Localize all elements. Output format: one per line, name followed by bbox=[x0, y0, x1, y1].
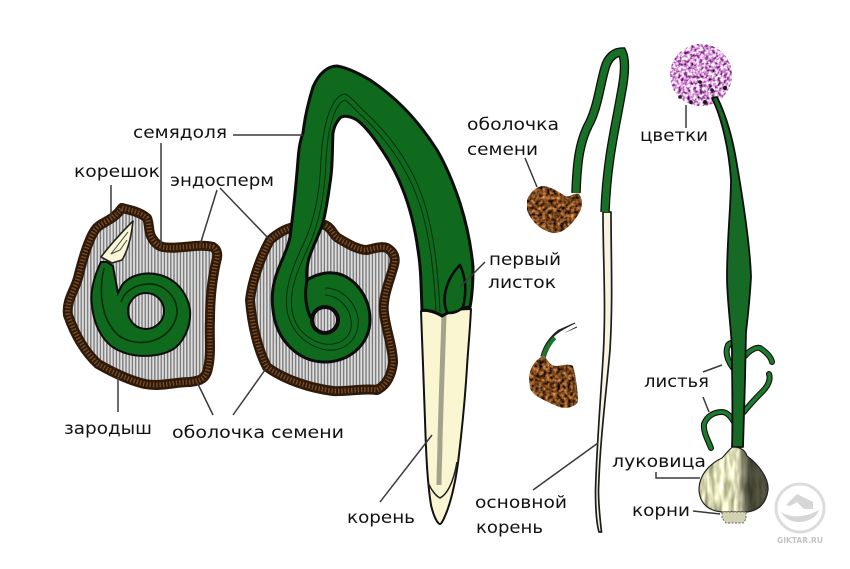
core of endosperm in coil bbox=[312, 307, 338, 333]
labels: основной bbox=[475, 493, 567, 513]
seed 1 coat bbox=[68, 208, 217, 385]
first leaf bbox=[445, 265, 465, 313]
sprout bbox=[543, 325, 576, 357]
roots bbox=[722, 512, 746, 523]
seed 1 endosperm core bbox=[128, 293, 164, 329]
labels: первый bbox=[489, 250, 561, 270]
seedling with coat and long main root bbox=[527, 52, 625, 532]
watermark logo bbox=[776, 484, 824, 545]
watermark logo: GIKTAR.RU bbox=[777, 536, 823, 545]
shoot bbox=[576, 52, 625, 212]
labels: корешок bbox=[74, 162, 160, 182]
labels: семени bbox=[467, 140, 538, 160]
labels: луковица bbox=[612, 452, 706, 472]
flower head bbox=[670, 44, 732, 106]
labels: цветки bbox=[640, 126, 708, 146]
labels: оболочка bbox=[467, 115, 559, 135]
seed 2 coat bbox=[250, 224, 395, 391]
labels: листок bbox=[488, 273, 556, 293]
flowering onion plant bbox=[670, 44, 772, 523]
labels bbox=[64, 115, 709, 538]
seed 2 with cotyledon and root bbox=[250, 66, 473, 524]
labels: оболочка семени bbox=[172, 423, 344, 443]
labels: листья bbox=[644, 372, 709, 392]
sprout seed coat bbox=[529, 356, 578, 408]
labels: эндосперм bbox=[170, 171, 274, 191]
seed 1: germinating embryo in cross-section bbox=[68, 208, 217, 385]
young sprouting seed bbox=[529, 325, 578, 408]
leader lines bbox=[111, 105, 722, 514]
labels: корень bbox=[476, 518, 543, 538]
main root bbox=[596, 212, 612, 532]
root bbox=[421, 309, 471, 524]
cotyledon bbox=[272, 66, 473, 362]
seed 1 embryo coil bbox=[91, 262, 190, 356]
bulb bbox=[699, 447, 768, 512]
labels: корни bbox=[632, 501, 690, 521]
labels: семядоля bbox=[133, 123, 227, 143]
stem and long leaf bbox=[712, 97, 751, 447]
seed 1 radicle tip bbox=[101, 221, 133, 263]
seed coat bbox=[527, 186, 582, 233]
labels: корень bbox=[347, 508, 415, 528]
labels: зародыш bbox=[64, 419, 152, 439]
basal leaves bbox=[704, 343, 772, 448]
